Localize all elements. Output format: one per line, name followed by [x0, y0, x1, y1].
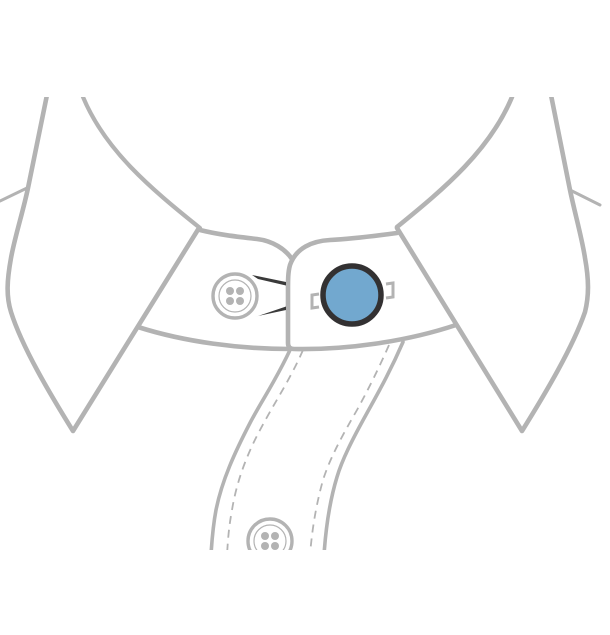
left bracket mark [312, 294, 319, 308]
right bracket mark [386, 283, 393, 298]
placket right edge [324, 342, 403, 555]
left neckline [83, 97, 200, 228]
placket left stitching [227, 350, 303, 555]
left collar band [138, 230, 292, 349]
placket left edge [211, 350, 290, 555]
collar button [213, 274, 257, 318]
lower thread [252, 306, 286, 318]
placket right stitching [310, 345, 389, 555]
left shoulder seam [0, 188, 27, 201]
blue button [323, 266, 381, 324]
placket button [246, 517, 294, 550]
left collar leaf [8, 90, 199, 431]
right shoulder seam [570, 190, 600, 205]
right neckline [397, 97, 512, 227]
right collar band flap [288, 233, 456, 349]
right collar leaf [397, 90, 588, 431]
shirt collar illustration [0, 97, 602, 550]
upper thread [252, 275, 286, 286]
